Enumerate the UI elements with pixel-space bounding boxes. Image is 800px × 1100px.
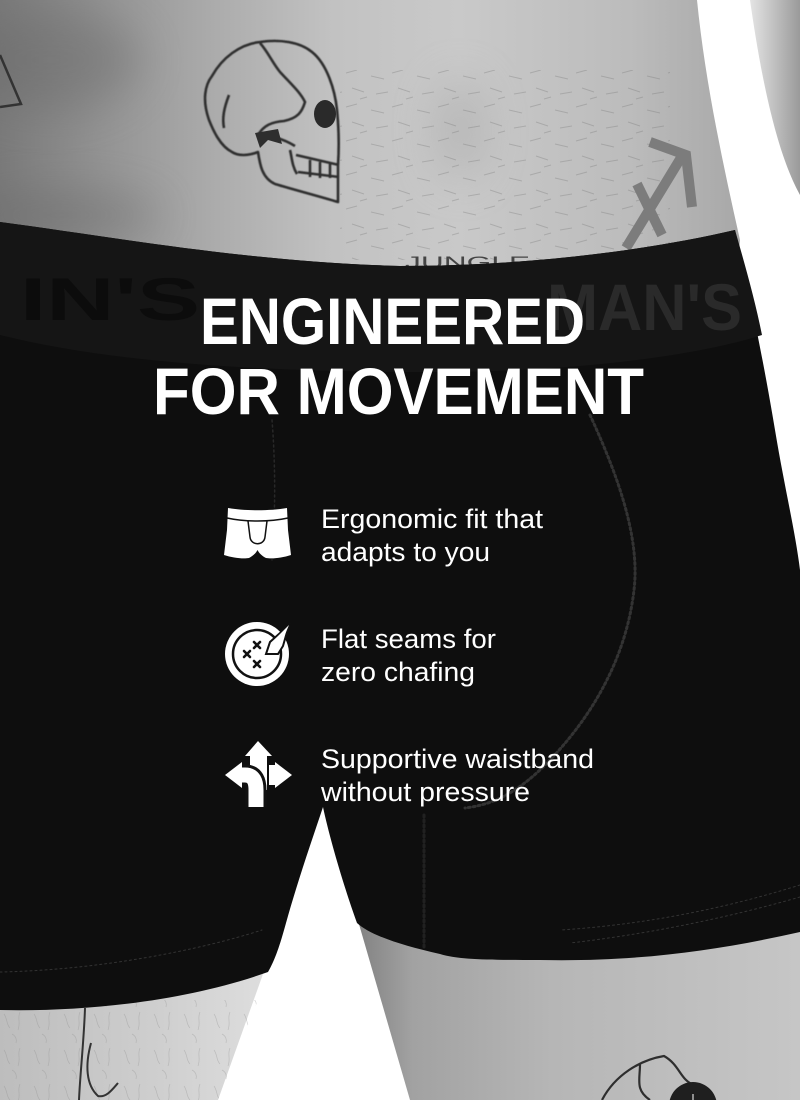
text: supportive waistband: without pressure <box>320 777 530 807</box>
text: ergonomic fit <box>321 504 544 567</box>
waistband logo right: MAN'S <box>547 270 742 344</box>
waistband <box>0 222 762 372</box>
photo: right arm <box>750 0 800 195</box>
icon: three-way arrows <box>225 741 292 807</box>
feature: flat seams <box>225 622 496 687</box>
text: ergonomic fit: adapts to you <box>321 537 490 567</box>
tattoo: left leg lines <box>79 1008 118 1100</box>
tattoo: skull cheek shadow <box>255 129 282 148</box>
icon: boxer briefs <box>224 508 291 558</box>
text: supportive waistband: Supportive waistband <box>321 744 594 774</box>
title: FOR MOVEMENT <box>153 354 644 428</box>
text: flat seams: Flat seams for <box>321 624 496 654</box>
tattoo: triangle <box>0 55 21 107</box>
photo: legs <box>0 900 800 1100</box>
tattoo: skull <box>205 41 339 202</box>
tattoo: skull eye socket <box>314 100 336 128</box>
text: supportive waistband <box>320 744 594 807</box>
photo: model torso <box>0 0 740 300</box>
text: flat seams <box>321 624 496 687</box>
garment seams <box>0 415 800 972</box>
tattoo: lettering above waistband: JUNGLE <box>405 253 530 272</box>
waistband logo left: IN'S <box>20 266 200 333</box>
photo: black boxer briefs <box>0 222 800 1010</box>
title: ENGINEERED <box>200 284 585 358</box>
tattoo: right leg leaf <box>602 1056 694 1100</box>
text: flat seams: zero chafing <box>321 657 475 687</box>
corner badge <box>669 1082 717 1100</box>
feature: ergonomic fit <box>224 504 544 567</box>
text: ergonomic fit: Ergonomic fit that <box>321 504 544 534</box>
tattoo: sagittarius arrow <box>626 142 692 248</box>
feature: supportive waistband <box>225 741 594 807</box>
title <box>153 284 644 428</box>
icon: button and needle <box>225 622 289 686</box>
